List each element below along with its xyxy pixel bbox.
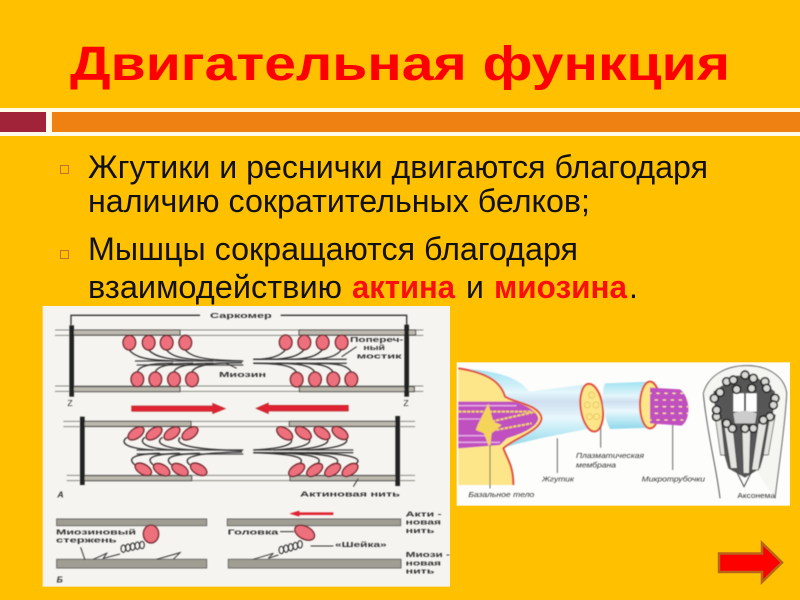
bullet marker 2	[60, 250, 69, 259]
bullet text 2: актина	[352, 269, 455, 305]
label: Головка: Головка	[228, 527, 280, 536]
label: Б: Б	[57, 575, 63, 585]
orange accent bar	[52, 112, 800, 132]
bullet text 2: .	[629, 269, 638, 305]
title: Двигательная функция	[70, 38, 730, 91]
cell body with basal body	[458, 368, 542, 488]
contracted sarcomere	[63, 416, 415, 487]
label: Актиновая нить short: нить	[406, 526, 435, 535]
bullet text 1: Жгутики и реснички двигаются благодаря	[88, 149, 708, 185]
label: Миозиновый стержень: Миозиновый	[56, 527, 136, 536]
label: Жгутик: Жгутик	[541, 477, 575, 484]
bullet text 2: Мышцы сокращаются благодаря	[88, 231, 578, 267]
bullet list	[60, 149, 708, 305]
relaxed sarcomere	[55, 325, 423, 397]
label: Плазматическая мембрана: мембрана	[576, 462, 616, 470]
label: Поперечный мостик	[350, 335, 404, 360]
arrow: right-pointing red	[132, 403, 225, 414]
diagram: flagellum structure	[456, 362, 790, 506]
label: Микротрубочки: Микротрубочки	[642, 476, 705, 484]
sarcomere bracket	[71, 315, 407, 325]
diagram: sarcomere contraction	[42, 306, 451, 587]
label: Поперечный мостик: Попереч-	[350, 335, 404, 344]
label: Z right: Z	[403, 398, 409, 408]
label: Актиновая нить short: Акти -	[406, 509, 442, 518]
arrow: next slide button	[718, 540, 784, 585]
label: Плазматическая мембрана: Плазматическая	[576, 453, 644, 460]
arrow: left-pointing red	[256, 403, 348, 414]
bullet text 1: наличию сократительных белков;	[88, 183, 590, 219]
label: Аксонема: Аксонема	[737, 493, 775, 500]
label: Плазматическая мембрана	[576, 453, 644, 470]
flagellum end with microtubules	[603, 382, 689, 470]
header divider bars	[0, 108, 800, 136]
detail: myosin head bent	[227, 511, 401, 568]
label: Z left: Z	[67, 398, 73, 408]
bullet text 2	[88, 231, 638, 305]
label: Базальное тело: Базальное тело	[468, 492, 534, 499]
bullet text 2: взаимодействию	[88, 269, 342, 305]
label: Поперечный мостик: мостик	[357, 351, 402, 360]
bullet text 2: миозина	[494, 269, 627, 305]
label: Актиновая нить: Актиновая нить	[300, 490, 400, 499]
label: Миозиновая нить short: нить	[406, 567, 435, 576]
flagellum segment	[458, 368, 606, 473]
bullet marker 1	[60, 165, 69, 174]
label: А: А	[56, 489, 64, 499]
crimson accent bar	[0, 112, 46, 132]
label: Миозиновая нить short: новая	[406, 558, 441, 567]
label: Миозиновый стержень	[56, 527, 136, 545]
label: Актиновая нить short: новая	[406, 518, 441, 527]
bullet text 2: и	[466, 269, 484, 305]
label: Шейка: «Шейка»	[335, 540, 387, 549]
label: Миозиновый стержень: стержень	[56, 536, 117, 545]
label: Саркомер: Саркомер	[210, 311, 272, 320]
label: Актиновая нить short	[406, 509, 442, 535]
label: Миозиновая нить short	[406, 550, 451, 576]
bullet text 1	[88, 149, 708, 219]
label: Поперечный мостик: ный	[363, 343, 385, 352]
label: Миозин: Миозин	[219, 370, 267, 379]
label: Миозиновая нить short: Миози -	[406, 550, 451, 559]
detail: myosin head resting	[57, 519, 207, 568]
axoneme cross-section	[703, 366, 787, 498]
